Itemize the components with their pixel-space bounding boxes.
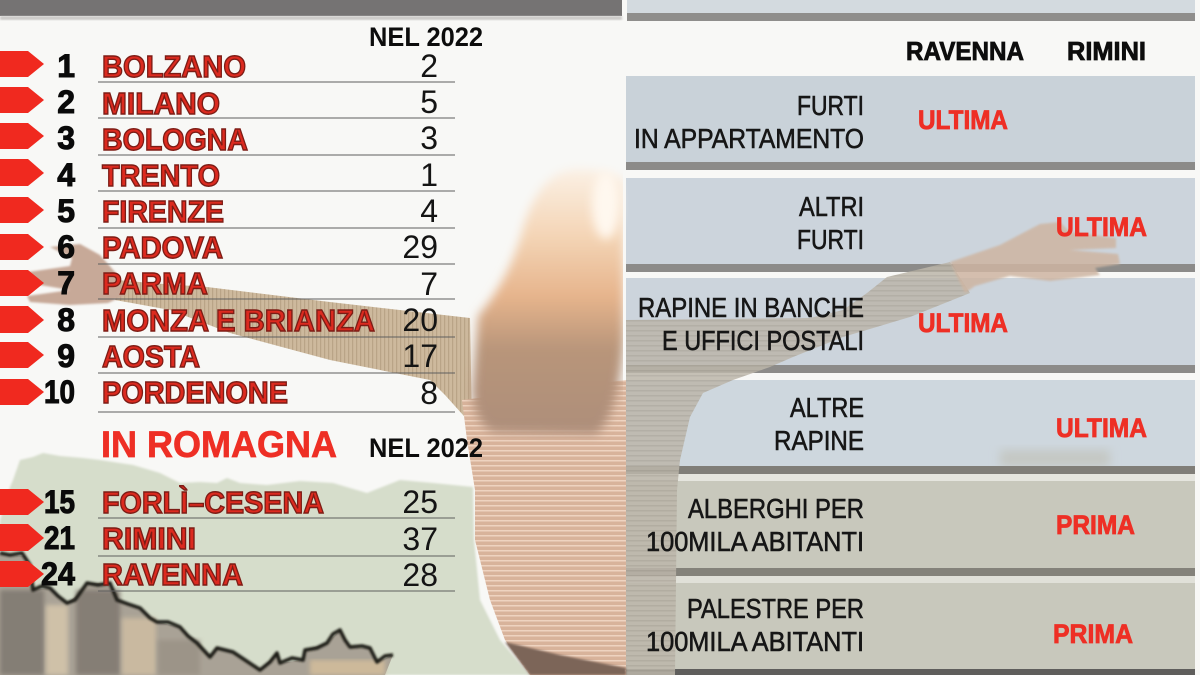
column label: nel 2022: NEL 2022 bbox=[369, 22, 483, 52]
rank numbers: 3 bbox=[57, 120, 75, 156]
values bbox=[402, 48, 438, 593]
sun glow bbox=[592, 171, 620, 239]
values: 7 bbox=[420, 266, 438, 302]
map: southern border and city bbox=[0, 553, 393, 675]
values: 20 bbox=[402, 302, 438, 338]
values: 2 bbox=[420, 48, 438, 84]
city names: FORLÌ–CESENA bbox=[102, 485, 324, 520]
row: alberghi per 100mila abitanti bbox=[646, 493, 1135, 557]
rank numbers: 9 bbox=[57, 338, 75, 374]
city names: BOLZANO bbox=[102, 49, 246, 84]
rank numbers: 24 bbox=[41, 556, 75, 592]
torso bbox=[462, 380, 626, 675]
row arrows bbox=[0, 51, 44, 587]
rank numbers: 10 bbox=[44, 374, 75, 410]
values: 3 bbox=[420, 120, 438, 156]
trousers bbox=[505, 642, 626, 675]
values: 1 bbox=[420, 157, 438, 193]
city names bbox=[102, 49, 375, 592]
city names: AOSTA bbox=[102, 339, 200, 374]
heading: in romagna: IN ROMAGNA bbox=[101, 424, 337, 465]
city names: RIMINI bbox=[102, 521, 196, 556]
column headers: RAVENNA bbox=[906, 36, 1024, 66]
row: altri furti bbox=[797, 191, 1147, 255]
row: palestre per 100mila abitanti: PRIMA bbox=[1053, 619, 1133, 649]
city names: RAVENNA bbox=[102, 557, 243, 592]
rank numbers: 2 bbox=[57, 84, 75, 120]
rank numbers: 7 bbox=[57, 265, 75, 301]
row: palestre per 100mila abitanti bbox=[646, 593, 1133, 657]
row: rapine in banche e uffici postali: ULTIMA bbox=[918, 308, 1008, 338]
city names: MONZA E BRIANZA bbox=[102, 303, 375, 338]
values: 5 bbox=[420, 84, 438, 120]
rank numbers: 21 bbox=[44, 520, 75, 556]
left sleeve bbox=[115, 280, 472, 425]
row: furti in appartamento: IN APPARTAMENTO bbox=[634, 123, 864, 154]
right hand bbox=[950, 222, 1120, 293]
comparison panel backgrounds bbox=[626, 0, 1195, 675]
column headers bbox=[906, 36, 1146, 66]
row: palestre per 100mila abitanti: 100MILA ABITANTI bbox=[646, 626, 864, 657]
right arm sleeve over panels bbox=[626, 262, 970, 675]
city names: PARMA bbox=[102, 266, 208, 301]
row: altri furti: ULTIMA bbox=[1056, 212, 1147, 242]
values: 25 bbox=[402, 484, 438, 520]
hair and head bbox=[472, 169, 624, 434]
row: altri furti: ALTRI bbox=[799, 191, 864, 222]
map: Emilia-Romagna bbox=[0, 453, 530, 675]
row: rapine in banche e uffici postali: RAPINE IN BANCHE bbox=[638, 292, 864, 323]
row: altre rapine: ALTRE bbox=[790, 392, 864, 423]
row: palestre per 100mila abitanti: PALESTRE PER bbox=[687, 593, 864, 624]
row: rapine in banche e uffici postali bbox=[638, 292, 1008, 356]
city names: PADOVA bbox=[102, 230, 223, 265]
row: furti in appartamento: FURTI bbox=[797, 90, 864, 121]
row: furti in appartamento bbox=[634, 90, 1008, 154]
rank numbers bbox=[41, 48, 75, 592]
row: alberghi per 100mila abitanti: ALBERGHI PER bbox=[688, 493, 864, 524]
panel: comparison table bbox=[634, 36, 1147, 657]
row: altri furti: FURTI bbox=[797, 224, 864, 255]
city names: FIRENZE bbox=[102, 194, 224, 229]
values: 37 bbox=[402, 521, 438, 557]
rank numbers: 4 bbox=[57, 157, 75, 193]
row: furti in appartamento: ULTIMA bbox=[918, 105, 1008, 135]
woman with open arms bbox=[27, 169, 1120, 675]
values: 29 bbox=[402, 229, 438, 265]
city names: PORDENONE bbox=[102, 375, 288, 410]
values: 17 bbox=[402, 338, 438, 374]
rank numbers: 5 bbox=[57, 193, 75, 229]
row: alberghi per 100mila abitanti: PRIMA bbox=[1056, 510, 1135, 540]
row lines bbox=[98, 82, 455, 591]
rank numbers: 6 bbox=[57, 229, 75, 265]
column headers: RIMINI bbox=[1067, 36, 1146, 66]
row: rapine in banche e uffici postali: E UFFICI POSTALI bbox=[662, 325, 864, 356]
column label: nel 2022 second: NEL 2022 bbox=[369, 433, 483, 463]
rank numbers: 1 bbox=[57, 48, 75, 84]
rank numbers: 15 bbox=[44, 484, 75, 520]
values: 8 bbox=[420, 375, 438, 411]
top bar left bbox=[0, 0, 622, 20]
row: altre rapine: ULTIMA bbox=[1056, 413, 1147, 443]
row: altre rapine: RAPINE bbox=[774, 425, 864, 456]
row: altre rapine bbox=[774, 392, 1147, 456]
left hand bbox=[27, 244, 125, 305]
rank numbers: 8 bbox=[57, 302, 75, 338]
city names: TRENTO bbox=[102, 158, 220, 193]
city names: MILANO bbox=[102, 86, 220, 121]
values: 28 bbox=[402, 557, 438, 593]
values: 4 bbox=[420, 193, 438, 229]
panel: ranking table bbox=[0, 22, 483, 593]
city names: BOLOGNA bbox=[102, 122, 248, 157]
row: alberghi per 100mila abitanti: 100MILA ABITANTI bbox=[646, 526, 864, 557]
